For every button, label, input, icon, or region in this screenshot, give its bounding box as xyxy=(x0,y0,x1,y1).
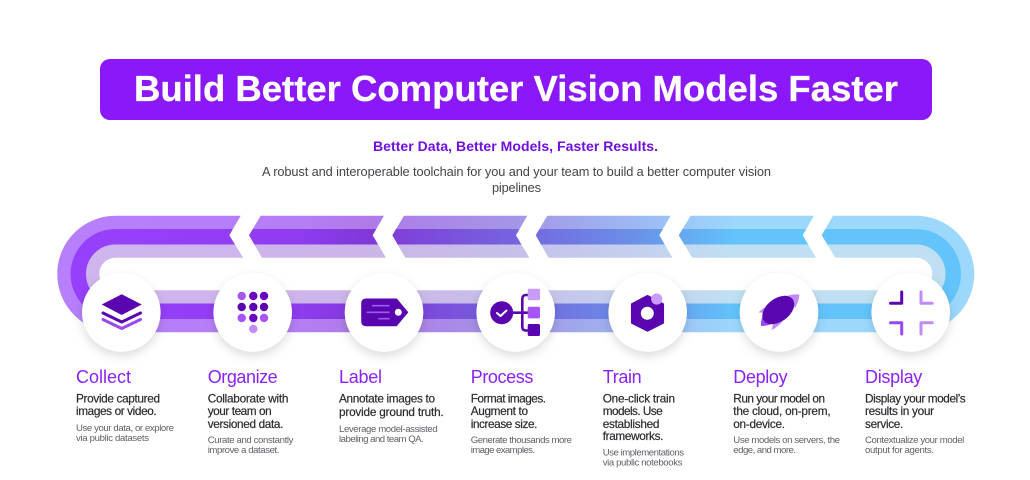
text block: process: Generate thousands more xyxy=(471,435,572,446)
text block: process: Augment to xyxy=(471,404,528,418)
text block: deploy: the cloud, on-prem, xyxy=(733,404,831,418)
text block: label: Leverage model-assisted xyxy=(339,424,438,435)
text block: train: Train xyxy=(603,367,642,387)
subtitle: Better Data, Better Models, Faster Results. xyxy=(373,138,658,154)
description: A robust and interoperable toolchain for you and your team to build a better computer vision xyxy=(262,164,771,179)
text block: process: Process xyxy=(471,367,533,387)
text block: train: models. Use xyxy=(603,404,663,418)
text block: deploy: on-device. xyxy=(733,417,785,431)
text block: label: provide ground truth. xyxy=(339,405,444,419)
text block: train: Use implementations xyxy=(603,448,684,459)
text block: label xyxy=(339,367,444,445)
text block: collect xyxy=(76,367,174,444)
text block: train: frameworks. xyxy=(603,429,663,443)
text block: organize: versioned data. xyxy=(208,417,283,431)
title banner: Build Better Computer Vision Models Faster xyxy=(134,68,898,109)
step: train icon xyxy=(608,273,687,352)
text block: organize: Curate and constantly xyxy=(208,435,294,446)
text block: display: Display xyxy=(865,367,922,387)
text block: organize: Collaborate with xyxy=(208,392,288,406)
text block: train: established xyxy=(603,417,659,431)
text block: organize: improve a dataset. xyxy=(208,445,279,456)
text block: label: labeling and team QA. xyxy=(339,434,424,445)
step: organize icon xyxy=(213,273,292,352)
text block: train: via public notebooks xyxy=(603,458,683,469)
text block: deploy: Deploy xyxy=(733,367,788,387)
text block: deploy: Run your model on xyxy=(733,392,825,406)
text block: label: Label xyxy=(339,367,382,387)
text block: collect: Use your data, or explore xyxy=(76,423,174,434)
text block: organize xyxy=(208,367,294,456)
text block: process xyxy=(471,367,572,456)
step: deploy icon xyxy=(740,273,818,352)
text block: process: increase size. xyxy=(471,417,537,431)
text block: process: Format images. xyxy=(471,392,546,406)
step: display icon xyxy=(871,273,950,352)
text block: collect: images or video. xyxy=(76,404,157,418)
text block: display: service. xyxy=(865,417,903,431)
text block: train xyxy=(603,367,684,469)
text block: deploy: Use models on servers, the xyxy=(733,435,840,446)
text block: process: image examples. xyxy=(471,445,535,456)
text block: display: Display your model’s xyxy=(865,392,966,406)
text block: organize: Organize xyxy=(208,367,278,387)
text block: train: One-click train xyxy=(603,392,675,406)
description: pipelines xyxy=(492,180,541,195)
step: collect icon xyxy=(82,273,161,352)
text block: deploy: edge, and more. xyxy=(733,445,796,456)
text block: display: results in your xyxy=(865,404,934,418)
text block: organize: your team on xyxy=(208,404,272,418)
step: process icon xyxy=(476,273,555,352)
title banner xyxy=(100,59,932,120)
text block: display xyxy=(865,367,966,456)
text block: collect: Provide captured xyxy=(76,392,160,406)
text block: collect: via public datasets xyxy=(76,433,149,444)
step: label icon xyxy=(345,273,423,352)
text block: deploy xyxy=(733,367,840,456)
text block: display: output for agents. xyxy=(865,445,934,456)
description xyxy=(262,164,771,195)
pipeline track: looping gradient band with chevrons xyxy=(64,214,968,326)
text block: display: Contextualize your model xyxy=(865,435,964,446)
text block: label: Annotate images to xyxy=(339,392,435,406)
text block: collect: Collect xyxy=(76,367,131,387)
